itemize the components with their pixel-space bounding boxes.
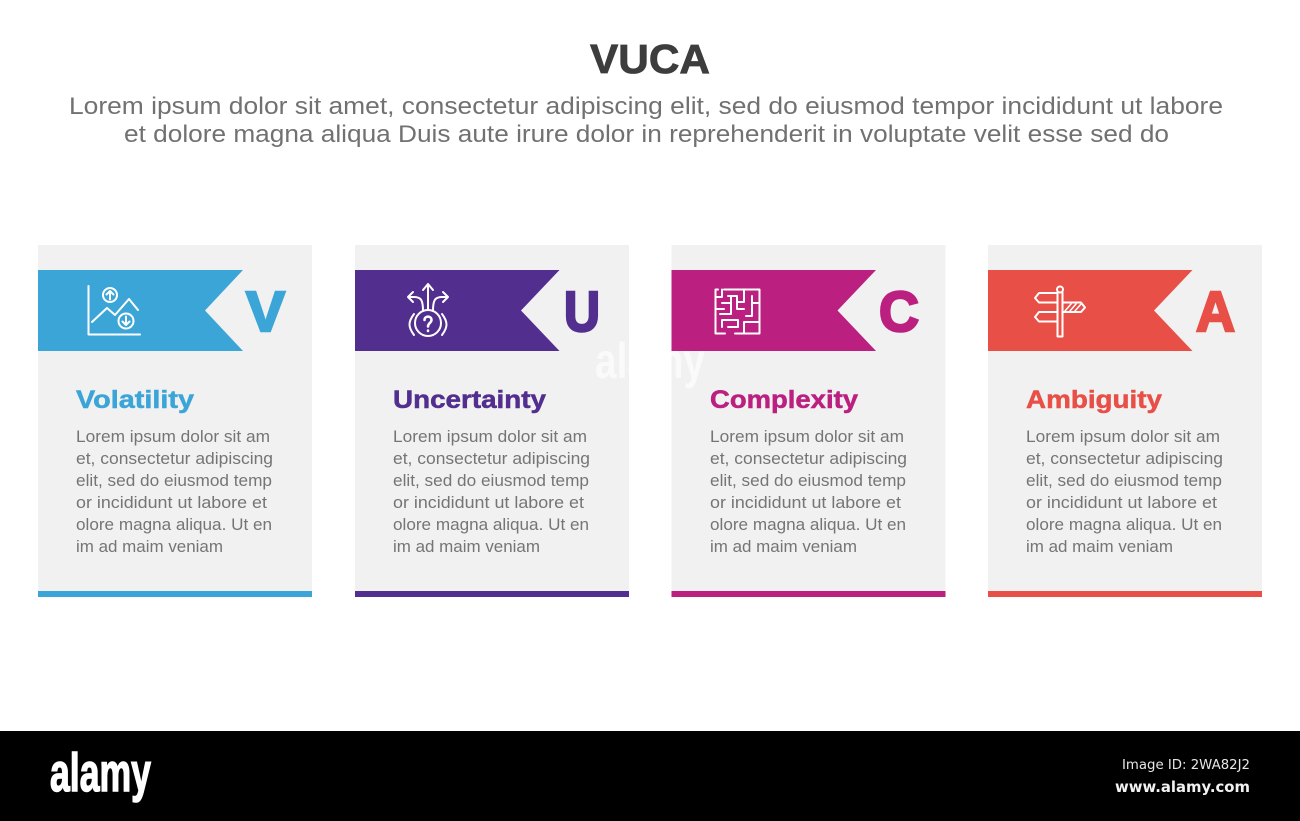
body text: uncertainty: Lorem ipsum dolor sit am <box>393 428 587 446</box>
body text: ambiguity: elit, sed do eiusmod temp <box>1026 472 1222 490</box>
panel: ambiguity <box>988 245 1262 597</box>
ribbon: ambiguity <box>988 270 1192 351</box>
footer band <box>0 731 1300 821</box>
body text: ambiguity: et, consectetur adipiscing <box>1026 450 1223 468</box>
icon: volatile line chart <box>88 286 140 334</box>
letter C: C <box>879 280 919 344</box>
subtitle text: Lorem ipsum dolor sit amet, consectetur adipiscing elit, sed do eiusmod tempor incididunt ut labore <box>69 93 1223 120</box>
body text: complexity: et, consectetur adipiscing <box>710 450 907 468</box>
body text: volatility: Lorem ipsum dolor sit am <box>76 428 270 446</box>
body text: volatility: elit, sed do eiusmod temp <box>76 472 272 490</box>
letter V: V <box>246 280 285 344</box>
image id: Image ID: 2WA82J2 <box>1122 757 1250 773</box>
panel: volatility <box>38 245 312 597</box>
body text: volatility: or incididunt ut labore et <box>76 494 267 512</box>
watermark: alamy <box>595 333 705 389</box>
ribbon: uncertainty <box>355 270 560 351</box>
ribbon: complexity <box>672 270 876 351</box>
heading: Uncertainty: Uncertainty <box>393 386 546 414</box>
body text: uncertainty: or incididunt ut labore et <box>393 494 584 512</box>
body text: volatility: im ad maim veniam <box>76 538 223 556</box>
body text: uncertainty: elit, sed do eiusmod temp <box>393 472 589 490</box>
heading: Ambiguity: Ambiguity <box>1026 386 1162 414</box>
body text: complexity: elit, sed do eiusmod temp <box>710 472 906 490</box>
icon: maze <box>716 290 760 334</box>
heading: Volatility: Volatility <box>76 386 194 414</box>
panel: uncertainty <box>355 245 629 597</box>
ribbon: volatility <box>38 270 243 351</box>
body text: complexity: Lorem ipsum dolor sit am <box>710 428 904 446</box>
body text: volatility: olore magna aliqua. Ut en <box>76 516 272 534</box>
body text: complexity <box>710 428 907 556</box>
panel: complexity <box>672 245 946 597</box>
body text: uncertainty: olore magna aliqua. Ut en <box>393 516 589 534</box>
body text: complexity: im ad maim veniam <box>710 538 857 556</box>
body text: volatility: et, consectetur adipiscing <box>76 450 273 468</box>
body text: uncertainty: et, consectetur adipiscing <box>393 450 590 468</box>
footer logo: alamy <box>50 743 151 803</box>
body text: volatility <box>76 428 273 556</box>
body text: ambiguity: im ad maim veniam <box>1026 538 1173 556</box>
heading: Complexity: Complexity <box>710 386 858 414</box>
body text: ambiguity <box>1026 428 1223 556</box>
website: www.alamy.com <box>1115 778 1250 796</box>
body text: complexity: olore magna aliqua. Ut en <box>710 516 906 534</box>
icon: signpost <box>1035 286 1085 336</box>
body text: complexity: or incididunt ut labore et <box>710 494 901 512</box>
subtitle text: et dolore magna aliqua Duis aute irure dolor in reprehenderit in voluptate velit esse sed do <box>124 121 1169 148</box>
body text: ambiguity: or incididunt ut labore et <box>1026 494 1217 512</box>
body text: uncertainty <box>393 428 590 556</box>
subtitle text <box>69 93 1223 148</box>
icon: branching arrows with question mark <box>408 284 448 336</box>
body text: ambiguity: olore magna aliqua. Ut en <box>1026 516 1222 534</box>
letter U: U <box>564 280 600 344</box>
title: VUCA <box>590 36 710 82</box>
body text: ambiguity: Lorem ipsum dolor sit am <box>1026 428 1220 446</box>
body text: uncertainty: im ad maim veniam <box>393 538 540 556</box>
letter A: A <box>1196 280 1235 344</box>
